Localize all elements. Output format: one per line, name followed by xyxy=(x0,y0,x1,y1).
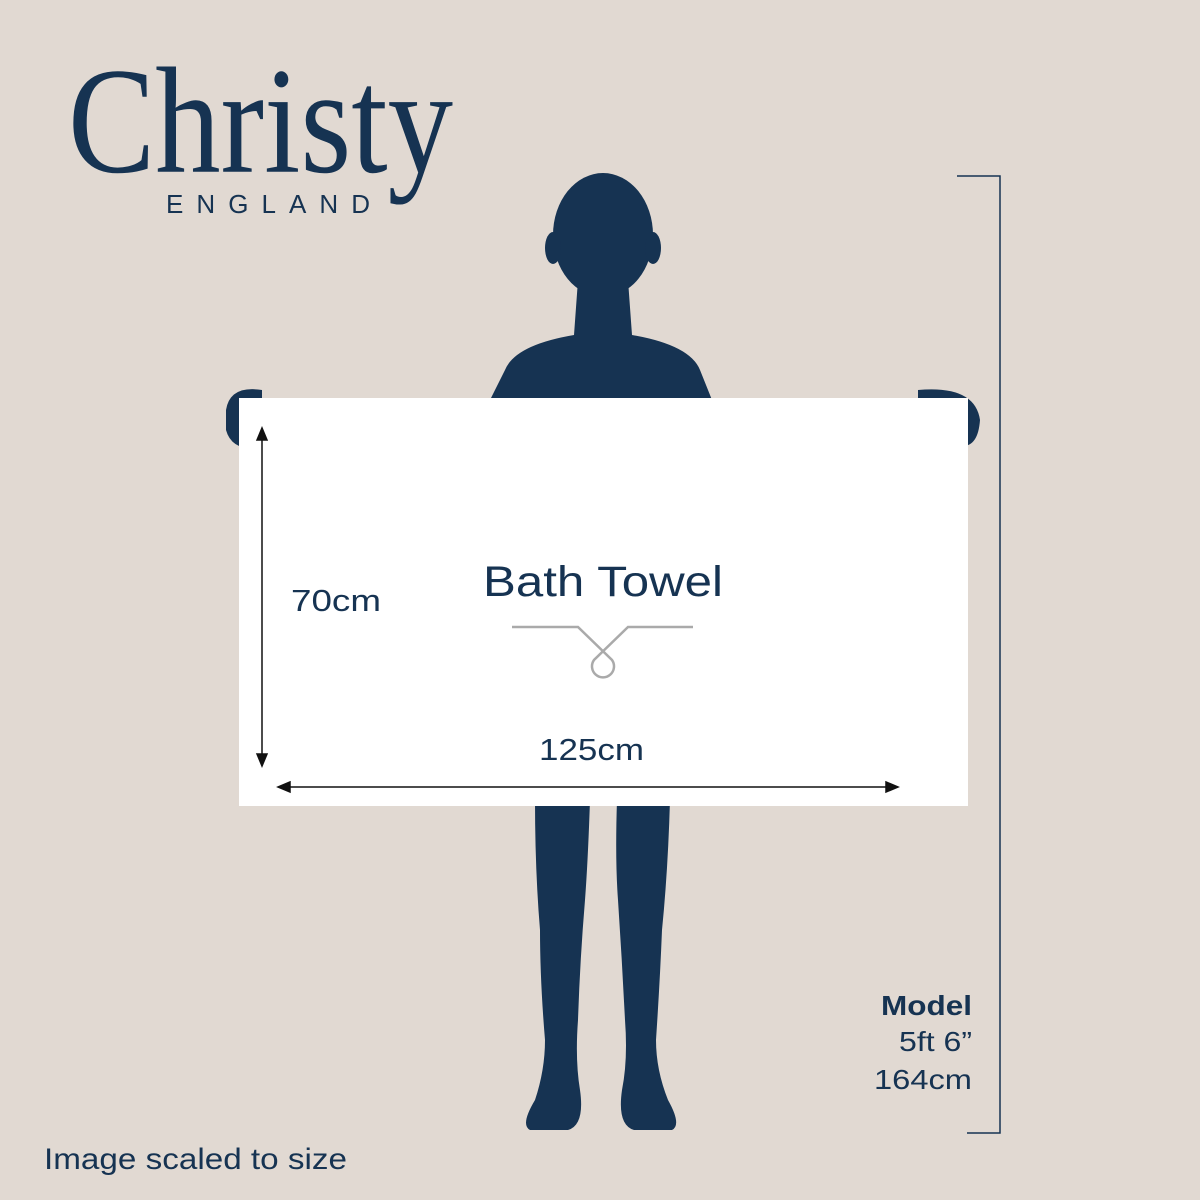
label: 70cm: 70cm xyxy=(291,583,381,618)
footnote: Image scaled to size xyxy=(44,1143,347,1176)
title: Bath Towel: Bath Towel xyxy=(483,558,723,606)
arrow: height xyxy=(257,428,267,766)
label: 125cm: 125cm xyxy=(539,732,644,767)
model label: 5ft 6” xyxy=(899,1026,972,1057)
icon: loop ornament xyxy=(512,627,693,677)
silhouette: model xyxy=(226,173,980,1130)
model label xyxy=(874,990,972,1095)
height bracket xyxy=(957,176,1000,1133)
arrow: width xyxy=(278,782,898,792)
model label: Model xyxy=(881,990,972,1021)
logo: ENGLAND xyxy=(166,189,370,219)
logo: Christy xyxy=(68,36,453,205)
towel xyxy=(239,398,968,806)
model label: 164cm xyxy=(874,1064,972,1095)
